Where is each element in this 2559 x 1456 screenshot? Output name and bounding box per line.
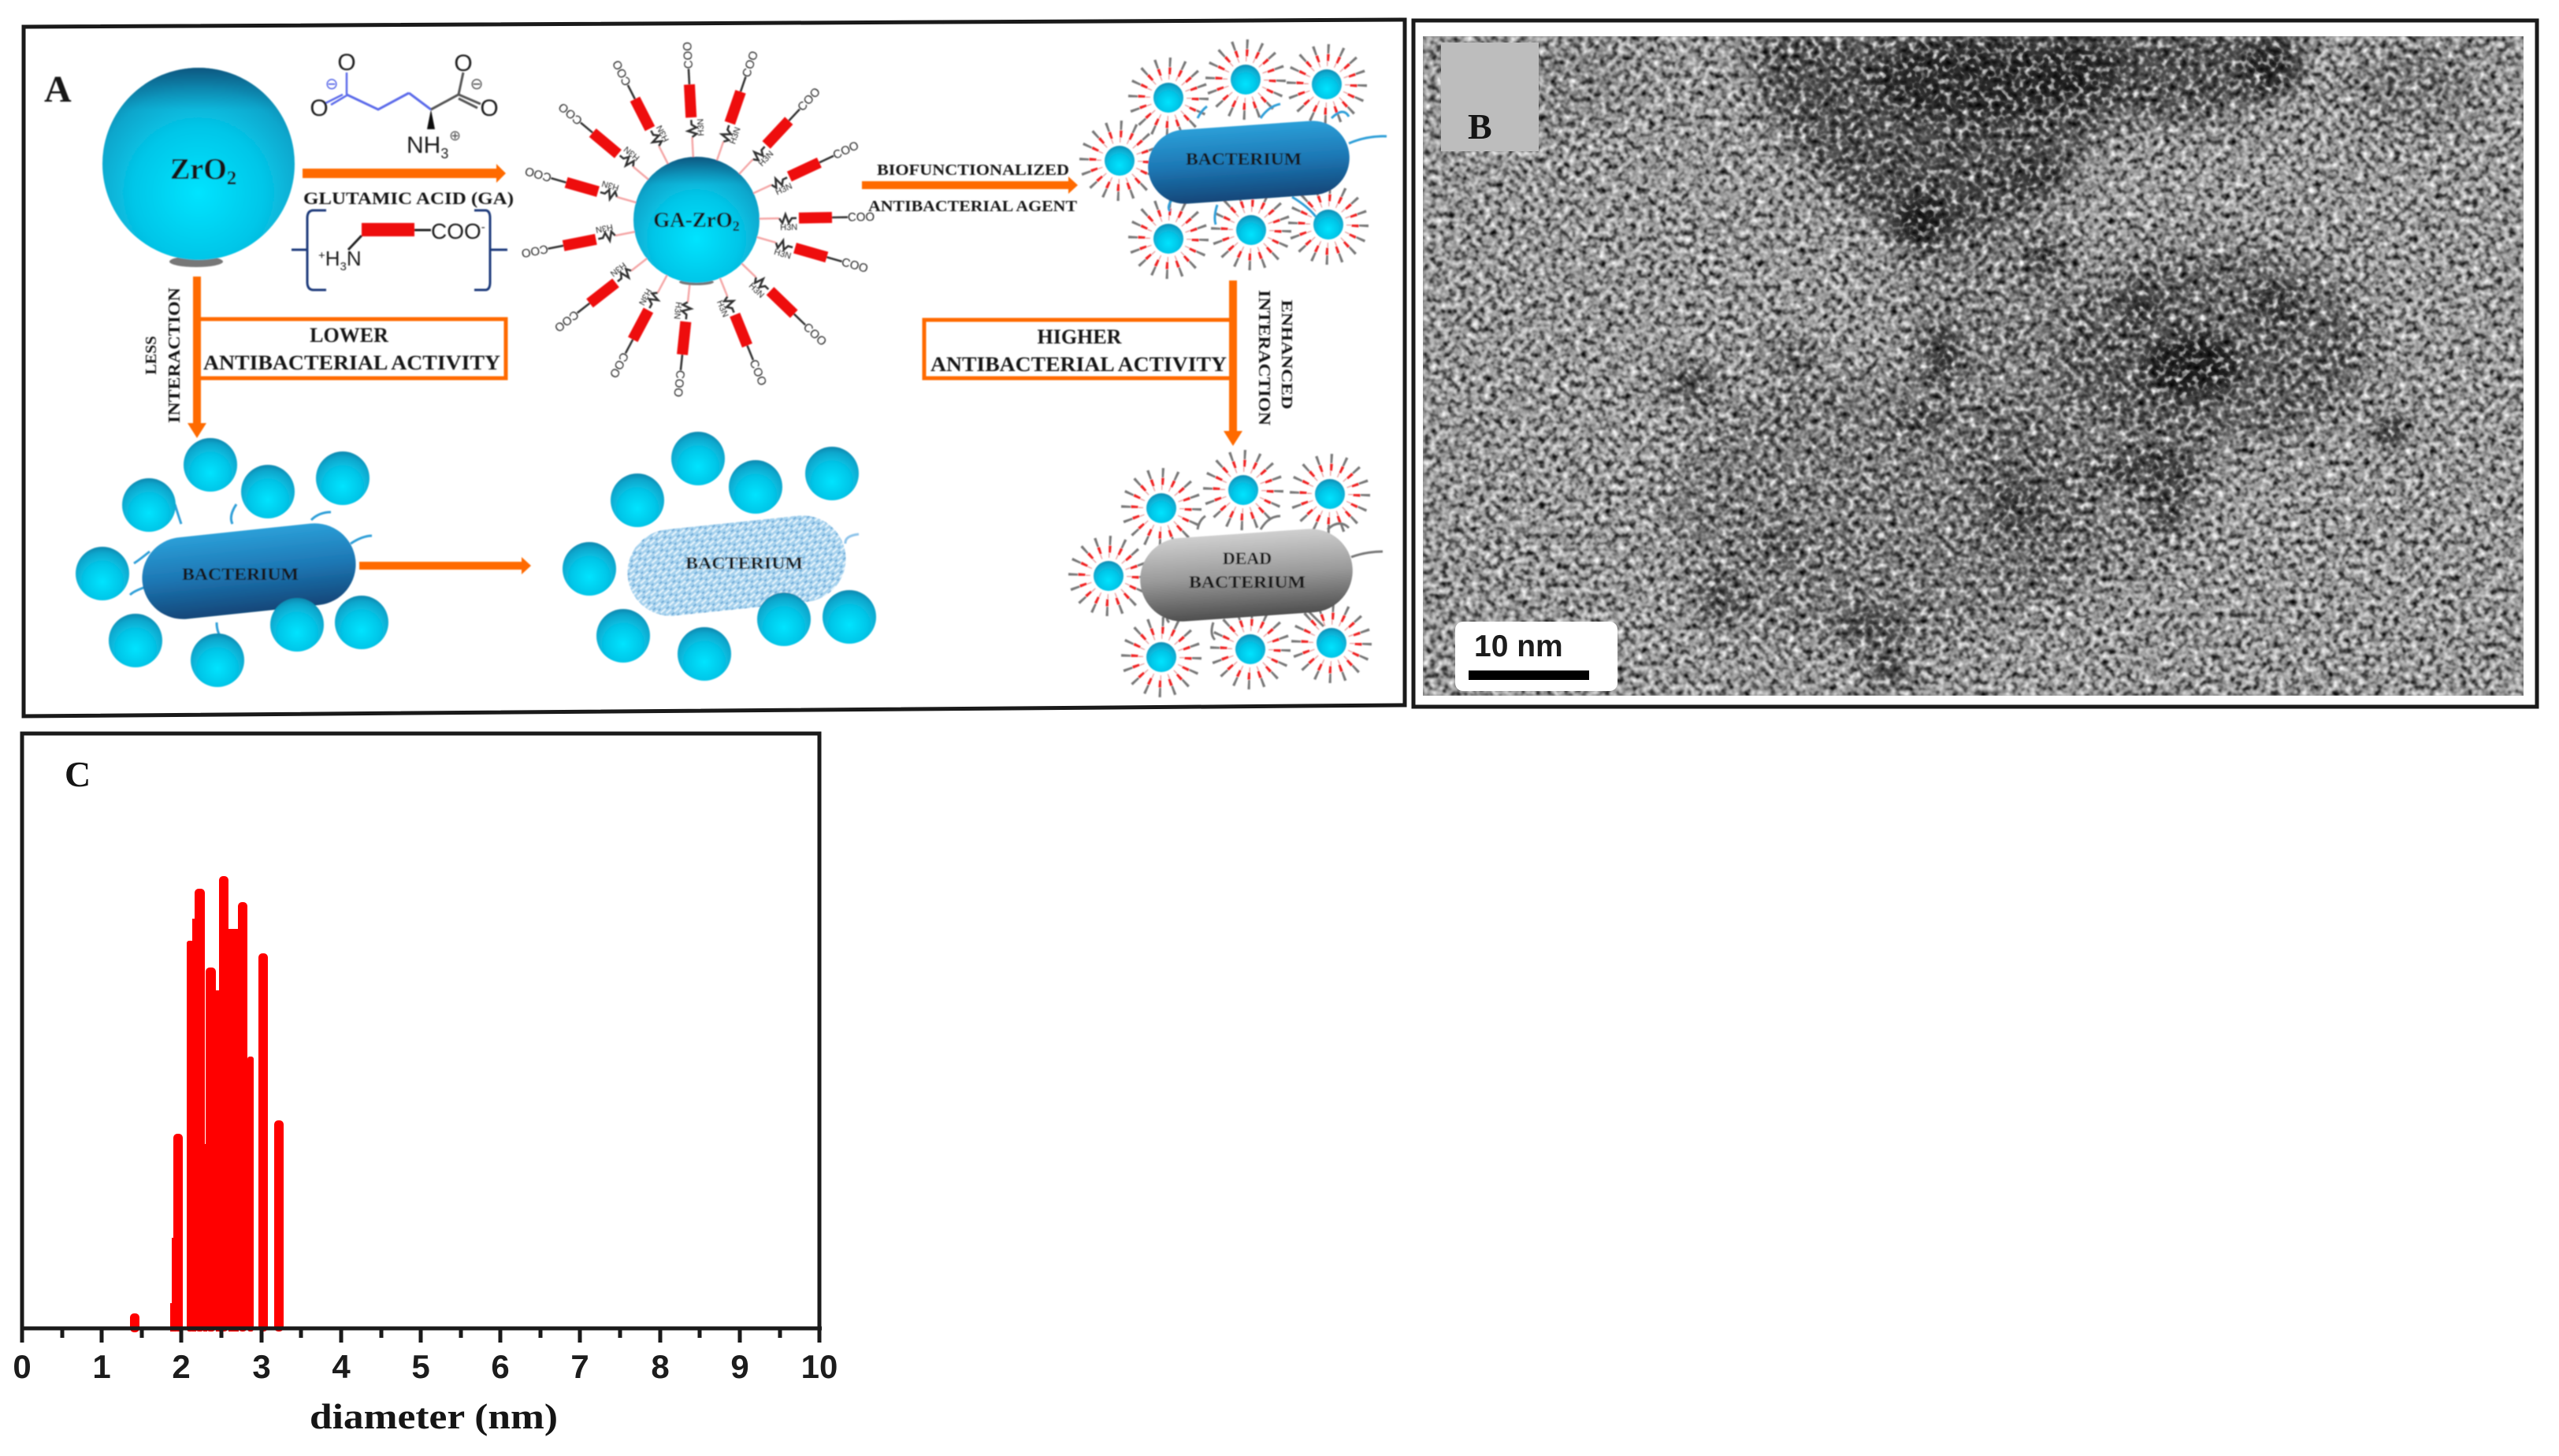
icon: GA-ZrO2 functionalized nanoparticle: H3N	[637, 287, 653, 306]
label B on grey box: B	[1468, 106, 1492, 147]
ligand repeat unit in brackets: 3	[340, 260, 347, 273]
icon: GA-ZrO2 functionalized nanoparticle: COO	[800, 321, 829, 349]
icon: GA-ZrO2 functionalized nanoparticle: COO	[831, 139, 861, 162]
icon: GA-ZrO2 functionalized nanoparticle: H3N	[747, 281, 766, 300]
ligand repeat unit in brackets: H	[325, 247, 340, 270]
icon: damaged bacterium with bare nanoparticles: BACTERIUM	[685, 553, 803, 573]
x axis tick labels: 7	[570, 1348, 589, 1385]
panel B: TEM micrograph	[1413, 20, 2537, 707]
x axis title: diameter (nm)	[310, 1396, 558, 1436]
ligand repeat unit in brackets: -	[481, 221, 485, 234]
icon: GA-ZrO2 functionalized nanoparticle: H3N	[655, 124, 671, 143]
icon: GA-ZrO2 functionalized nanoparticle: COO	[795, 85, 823, 114]
icon: GA-ZrO2 functionalized nanoparticle: COO	[552, 307, 581, 335]
icon: GA-ZrO2 functionalized nanoparticle: H3N	[715, 299, 730, 318]
icon: GA-ZrO2 functionalized nanoparticle: H3N	[757, 149, 776, 169]
box: higher antibacterial activity	[924, 320, 1233, 378]
scale bar: 10 nm: 10 nm	[1474, 630, 1563, 663]
x axis tick labels: 4	[332, 1348, 351, 1385]
icon: bacterium with bare nanoparticles	[76, 438, 388, 687]
x axis tick labels: 2	[172, 1348, 191, 1385]
icon: damaged bacterium with bare nanoparticles	[563, 432, 876, 681]
label: less interaction	[143, 288, 184, 423]
label: less interaction: INTERACTION	[165, 288, 184, 423]
panel A: antibacterial mechanism scheme	[24, 20, 1405, 716]
icon: GA-ZrO2 functionalized nanoparticle: COO	[840, 255, 870, 276]
ligand repeat unit in brackets: +	[318, 249, 325, 262]
icon: GA-ZrO2 functionalized nanoparticle: COO	[747, 358, 769, 388]
box: lower antibacterial activity	[197, 319, 506, 378]
icon: GA-ZrO2 functionalized nanoparticle: COO	[740, 50, 761, 79]
icon: GA-ZrO2 functionalized nanoparticle: H3N	[780, 223, 797, 232]
icon: GA-ZrO2 functionalized nanoparticle: COO	[670, 370, 687, 398]
glutamic acid structure: O	[337, 50, 356, 76]
icon: GA-ZrO2 functionalized nanoparticle	[519, 41, 875, 398]
glutamic acid structure: O	[310, 95, 329, 121]
arrow: bacterium to damaged bacterium	[359, 557, 531, 574]
glutamic acid structure: O	[454, 50, 473, 76]
plot frame	[22, 734, 819, 1328]
x axis tick labels: 10	[801, 1348, 838, 1385]
panel A frame	[24, 20, 1405, 716]
glutamic acid structure	[310, 50, 499, 162]
box: higher antibacterial activity: ANTIBACTERIAL ACTIVITY	[930, 353, 1227, 376]
icon: dead bacterium with functionalized nanoparticles	[1073, 455, 1383, 693]
glutamic acid structure: 3	[440, 146, 448, 162]
icon: GA-ZrO2 functionalized nanoparticle: H3N	[728, 126, 743, 146]
label: enhanced interaction: ENHANCED	[1278, 299, 1295, 410]
icon: bacterium with functionalized nanoparticles: BACTERIUM	[1186, 149, 1302, 169]
glutamic acid structure: NH	[407, 132, 440, 158]
ligand repeat unit in brackets	[292, 210, 507, 290]
x axis tick labels: 9	[730, 1348, 749, 1385]
icon: GA-ZrO2 functionalized nanoparticle: H3N	[672, 302, 683, 320]
label: glutamic acid: GLUTAMIC ACID (GA)	[303, 188, 514, 208]
ligand repeat unit in brackets: COO	[431, 219, 481, 243]
icon: GA-ZrO2 functionalized nanoparticle: COO	[610, 58, 634, 88]
icon: GA-ZrO2 functionalized nanoparticle: H3N	[601, 178, 620, 192]
icon: GA-ZrO2 functionalized nanoparticle: H3N	[608, 260, 628, 278]
glutamic acid structure: ⊖	[325, 74, 338, 93]
icon: bacterium with functionalized nanoparticles	[1084, 44, 1387, 274]
icon: ZrO2 sphere: 2	[227, 168, 236, 189]
glutamic acid structure: ⊕	[449, 128, 461, 144]
icon: GA-ZrO2 functionalized nanoparticle: COO	[848, 210, 875, 225]
icon: GA-ZrO2 functionalized nanoparticle: COO	[607, 350, 631, 380]
icon: GA-ZrO2 functionalized nanoparticle: H3N	[696, 118, 706, 136]
x axis tick labels: 1	[92, 1348, 111, 1385]
label: biofunctionalized antibacterial agent: BIOFUNCTIONALIZED	[877, 162, 1069, 179]
box: lower antibacterial activity: ANTIBACTERIAL ACTIVITY	[203, 351, 500, 374]
label B on grey box	[1441, 43, 1539, 151]
glutamic acid structure: ⊖	[470, 74, 483, 93]
icon: GA-ZrO2 functionalized nanoparticle: COO	[556, 100, 585, 128]
label A: A	[44, 69, 72, 110]
x axis tick labels	[13, 1348, 838, 1385]
icon: GA-ZrO2 functionalized nanoparticle: COO	[681, 42, 696, 69]
icon: ZrO2 sphere	[102, 68, 295, 267]
icon: GA-ZrO2 functionalized nanoparticle: H3N	[774, 181, 794, 198]
arrow: enhanced interaction pathway	[1224, 280, 1242, 446]
label: enhanced interaction	[1255, 290, 1295, 425]
x axis tick labels: 3	[252, 1348, 271, 1385]
box: higher antibacterial activity: HIGHER	[1038, 325, 1122, 348]
label: enhanced interaction: INTERACTION	[1255, 290, 1274, 425]
TEM image	[1423, 24, 2524, 696]
label: biofunctionalized antibacterial agent	[868, 162, 1078, 215]
glutamic acid structure: O	[480, 95, 499, 121]
arrow: ZrO2 to GA-ZrO2	[303, 164, 506, 183]
arrow: GA-ZrO2 to bacterium	[862, 176, 1078, 194]
icon: GA-ZrO2 functionalized nanoparticle: H3N	[622, 144, 641, 162]
icon: dead bacterium with functionalized nanoparticles: BACTERIUM	[1189, 572, 1305, 592]
x axis tick labels: 8	[651, 1348, 670, 1385]
icon: bacterium with bare nanoparticles: BACTERIUM	[182, 564, 299, 584]
icon: GA-ZrO2 functionalized nanoparticle: 2	[733, 218, 740, 234]
arrow: less interaction pathway	[188, 277, 206, 438]
box: lower antibacterial activity: LOWER	[310, 324, 388, 347]
histogram bars	[130, 876, 284, 1332]
panel C: size distribution histogram	[13, 734, 838, 1436]
panel B frame	[1413, 20, 2537, 707]
icon: dead bacterium with functionalized nanoparticles: DEAD	[1223, 548, 1272, 568]
icon: GA-ZrO2 functionalized nanoparticle: H3N	[595, 222, 614, 235]
ligand repeat unit in brackets: N	[347, 247, 362, 270]
x axis tick labels: 0	[13, 1348, 32, 1385]
icon: GA-ZrO2 functionalized nanoparticle: COO	[520, 242, 549, 260]
x axis with ticks	[20, 1328, 822, 1343]
x axis tick labels: 6	[491, 1348, 510, 1385]
x axis tick labels: 5	[411, 1348, 430, 1385]
icon: ZrO2 sphere: ZrO	[170, 153, 227, 186]
label: less interaction: LESS	[143, 336, 160, 374]
label C: C	[65, 754, 91, 794]
scale bar: 10 nm	[1455, 622, 1617, 691]
icon: GA-ZrO2 functionalized nanoparticle: H3N	[773, 247, 792, 262]
label: biofunctionalized antibacterial agent: ANTIBACTERIAL AGENT	[868, 198, 1078, 215]
icon: GA-ZrO2 functionalized nanoparticle: COO	[523, 164, 553, 184]
icon: GA-ZrO2 functionalized nanoparticle: GA-ZrO	[653, 208, 733, 232]
panel A scheme artwork	[44, 41, 1387, 693]
